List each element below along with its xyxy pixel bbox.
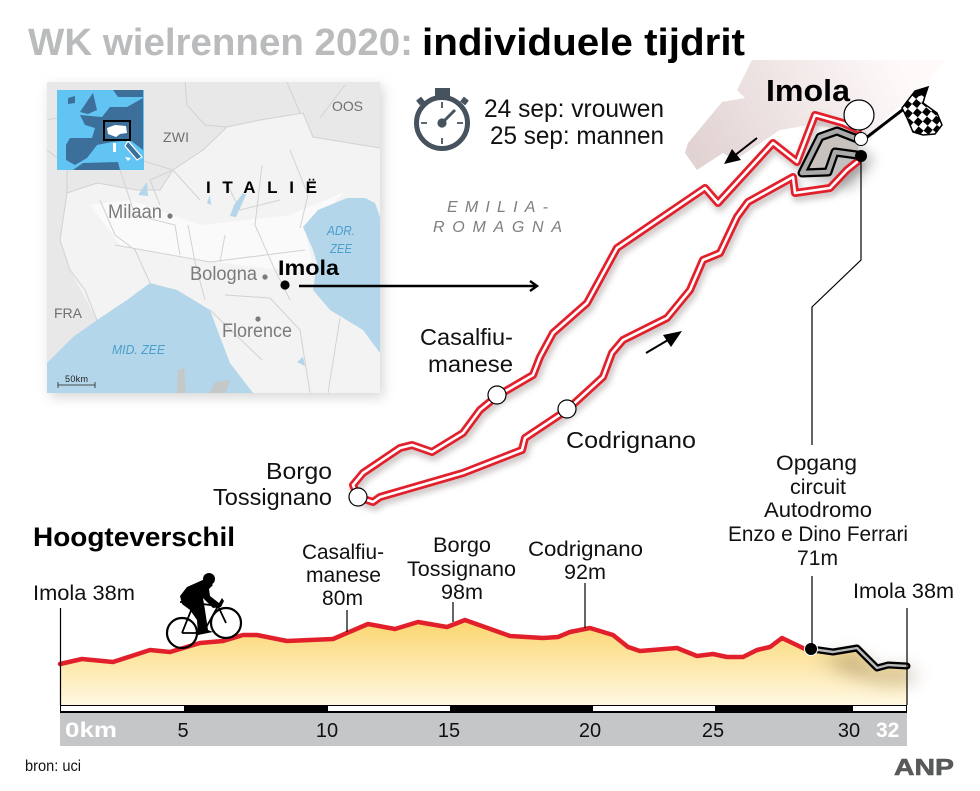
distance bar: 25 [702, 720, 724, 742]
profile labels: Codrignano [528, 538, 643, 561]
icon: stopwatch [416, 88, 468, 148]
race dates: 24 sep: vrouwen [484, 95, 664, 123]
profile labels: 71m [797, 547, 838, 570]
route markers [349, 100, 874, 506]
elevation profile chart [60, 576, 915, 705]
icon: checkered flag [862, 87, 942, 141]
profile labels: manese [306, 564, 381, 587]
circuit [802, 131, 860, 173]
profile labels: Tossignano [407, 558, 516, 581]
map labels: ZWI [163, 129, 189, 145]
heading: Hoogteverschil: Hoogteverschil [33, 522, 235, 552]
distance bar: 32 [876, 719, 899, 742]
profile labels: circuit [790, 476, 846, 499]
route labels: Codrignano [566, 427, 696, 453]
region label: ROMAGNA [433, 219, 562, 236]
region label: EMILIA- [447, 199, 548, 216]
map labels: OOS [332, 98, 363, 114]
map labels: ZEE [329, 241, 352, 256]
panel: locator map of Italy [47, 82, 383, 397]
lakes [138, 182, 305, 366]
Mediterranean sea [47, 283, 253, 393]
map labels: Imola [278, 257, 339, 280]
race dates: 25 sep: mannen [490, 122, 664, 150]
profile labels: 92m [564, 561, 606, 584]
profile labels: Enzo e Dino Ferrari [728, 523, 908, 546]
inset: Europe [57, 90, 144, 170]
route map [353, 115, 875, 506]
distance bar: 30 [838, 720, 860, 742]
profile labels: 98m [441, 581, 483, 604]
route labels: Casalfiu- [420, 324, 513, 350]
profile labels: 80m [322, 587, 363, 610]
map labels: ITALIË [206, 178, 317, 197]
leader line: circuit entrance [812, 160, 861, 445]
profile labels: Casalfiu- [302, 541, 384, 564]
route labels: Tossignano [213, 484, 332, 510]
profile labels [33, 452, 954, 610]
profile labels: Imola 38m [853, 580, 954, 603]
profile labels: Imola 38m [33, 582, 135, 605]
route labels: Borgo [266, 458, 332, 484]
source: bron: uci [25, 758, 81, 775]
title [28, 22, 745, 64]
route labels: manese [428, 351, 513, 377]
route labels [213, 73, 851, 510]
distance bar [60, 705, 907, 746]
distance bar: 15 [438, 720, 460, 742]
region label [433, 199, 562, 236]
profile labels: Autodromo [764, 499, 872, 522]
profile labels: Opgang [776, 452, 857, 475]
race dates [484, 95, 664, 150]
map labels [54, 98, 363, 388]
map labels: ADR. [326, 223, 355, 238]
distance bar: 10 [316, 720, 338, 742]
map labels: Florence [222, 321, 292, 342]
route labels: Imola [766, 73, 851, 108]
Imola area [685, 60, 945, 170]
arrow: Imola to route [280, 280, 537, 291]
map labels: Bologna [190, 264, 257, 285]
distance bar: 5 [177, 720, 189, 742]
title: WK wielrennen 2020: [28, 22, 413, 64]
icon: cyclist [167, 573, 241, 648]
map labels: MID. ZEE [112, 342, 165, 357]
map labels: Milaan [108, 202, 162, 223]
direction arrows [646, 138, 757, 353]
logo: ANP: ANP [894, 754, 954, 780]
distance bar: 20 [579, 720, 601, 742]
map labels: FRA [54, 305, 83, 321]
distance bar: 0km [65, 719, 117, 742]
map labels: 50km [65, 374, 88, 384]
profile labels: Borgo [433, 534, 491, 557]
Adriatic sea [303, 198, 380, 353]
title: individuele tijdrit [422, 22, 745, 64]
